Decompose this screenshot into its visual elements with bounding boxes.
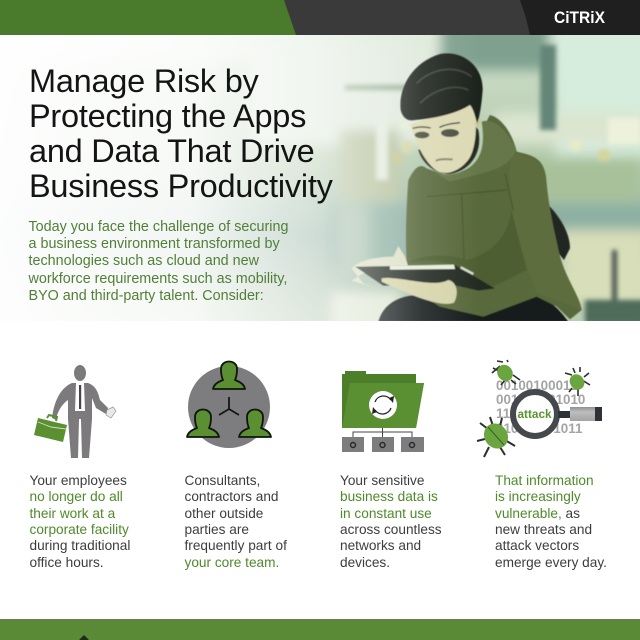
hero photo: woman reading a tablet bbox=[352, 53, 582, 322]
person right bbox=[239, 410, 271, 437]
icon: people in a circle bbox=[187, 362, 271, 448]
text: employees: their work at a bbox=[30, 506, 116, 521]
text: vulnerable: emerge every day. bbox=[495, 555, 607, 570]
text: consultants: frequently part of bbox=[184, 538, 287, 553]
tablet bbox=[355, 265, 495, 291]
hand holding tablet bbox=[382, 278, 457, 304]
bug top left bbox=[492, 360, 520, 385]
text: sensitive data: business data is bbox=[340, 489, 438, 504]
text: sensitive data: devices. bbox=[340, 555, 390, 570]
icon: folder with sync and sub-folders bbox=[342, 371, 424, 452]
text: employees: Your employees bbox=[30, 473, 127, 488]
icon: bugs and magnifier over binary: attack bbox=[518, 407, 552, 421]
sub-folders bbox=[342, 437, 424, 452]
binary digits: 00100100011 bbox=[496, 378, 578, 393]
backpack bbox=[548, 205, 570, 260]
white fade over photo bbox=[0, 35, 640, 321]
text: sensitive data: across countless bbox=[340, 522, 442, 537]
text: sensitive data: in constant use bbox=[340, 506, 432, 521]
title: Business Productivity bbox=[29, 168, 334, 204]
icon: businessman with briefcase bbox=[34, 365, 116, 458]
title: and Data That Drive bbox=[29, 133, 314, 169]
binary digits: 010111101011 bbox=[496, 421, 583, 436]
magnifier bbox=[513, 392, 557, 436]
hand behind tablet bbox=[352, 246, 408, 288]
jacket bbox=[406, 115, 582, 319]
intro paragraph: BYO and third-party talent. Consider: bbox=[28, 288, 264, 304]
face bbox=[411, 103, 476, 173]
text: sensitive data: Your sensitive bbox=[340, 473, 424, 488]
title: Protecting the Apps bbox=[29, 98, 306, 134]
person top bbox=[213, 362, 245, 389]
title: Manage Risk by bbox=[29, 63, 260, 99]
intro paragraph: technologies such as cloud and new bbox=[28, 253, 260, 269]
binary digits: 001010101010 bbox=[496, 392, 585, 407]
text: employees: during traditional bbox=[30, 538, 130, 553]
bug bottom left bbox=[477, 417, 515, 457]
text: vulnerable: vulnerable, as bbox=[495, 506, 580, 521]
binary digits: 110 bbox=[496, 406, 518, 421]
logo: Citrix: CiTRiX bbox=[554, 9, 605, 27]
text: consultants: parties are bbox=[184, 522, 249, 537]
icon: green briefcase bbox=[34, 415, 67, 442]
text: consultants: other outside bbox=[184, 506, 263, 521]
text: employees: no longer do all bbox=[30, 489, 123, 504]
text: sensitive data: networks and bbox=[340, 538, 421, 553]
top header band bbox=[0, 0, 640, 35]
icon: bugs and magnifier over binary bbox=[477, 360, 602, 457]
text: consultants: your core team. bbox=[184, 555, 279, 570]
hood bbox=[438, 120, 516, 182]
eyes, brows and mouth bbox=[415, 132, 429, 138]
person left bbox=[187, 410, 219, 437]
text: vulnerable: is increasingly bbox=[495, 489, 581, 504]
trousers bbox=[378, 295, 568, 322]
text: vulnerable: That information bbox=[495, 473, 594, 488]
hero photo background bbox=[92, 35, 640, 321]
text: consultants: Consultants, bbox=[184, 473, 260, 488]
intro paragraph: Today you face the challenge of securing bbox=[28, 219, 288, 235]
text: vulnerable: new threats and bbox=[495, 522, 592, 537]
text: employees: office hours. bbox=[30, 555, 104, 570]
text: consultants: contractors and bbox=[184, 489, 279, 504]
jacket shading bbox=[414, 213, 526, 286]
intro paragraph: workforce requirements such as mobility, bbox=[28, 271, 287, 287]
neck and collar bbox=[418, 123, 479, 174]
intro paragraph: a business environment transformed by bbox=[28, 236, 280, 252]
footer band bbox=[0, 619, 640, 640]
text: vulnerable: attack vectors bbox=[495, 538, 579, 553]
bug top right bbox=[565, 367, 590, 396]
text: employees: corporate facility bbox=[30, 522, 129, 537]
hair bbox=[400, 53, 483, 123]
